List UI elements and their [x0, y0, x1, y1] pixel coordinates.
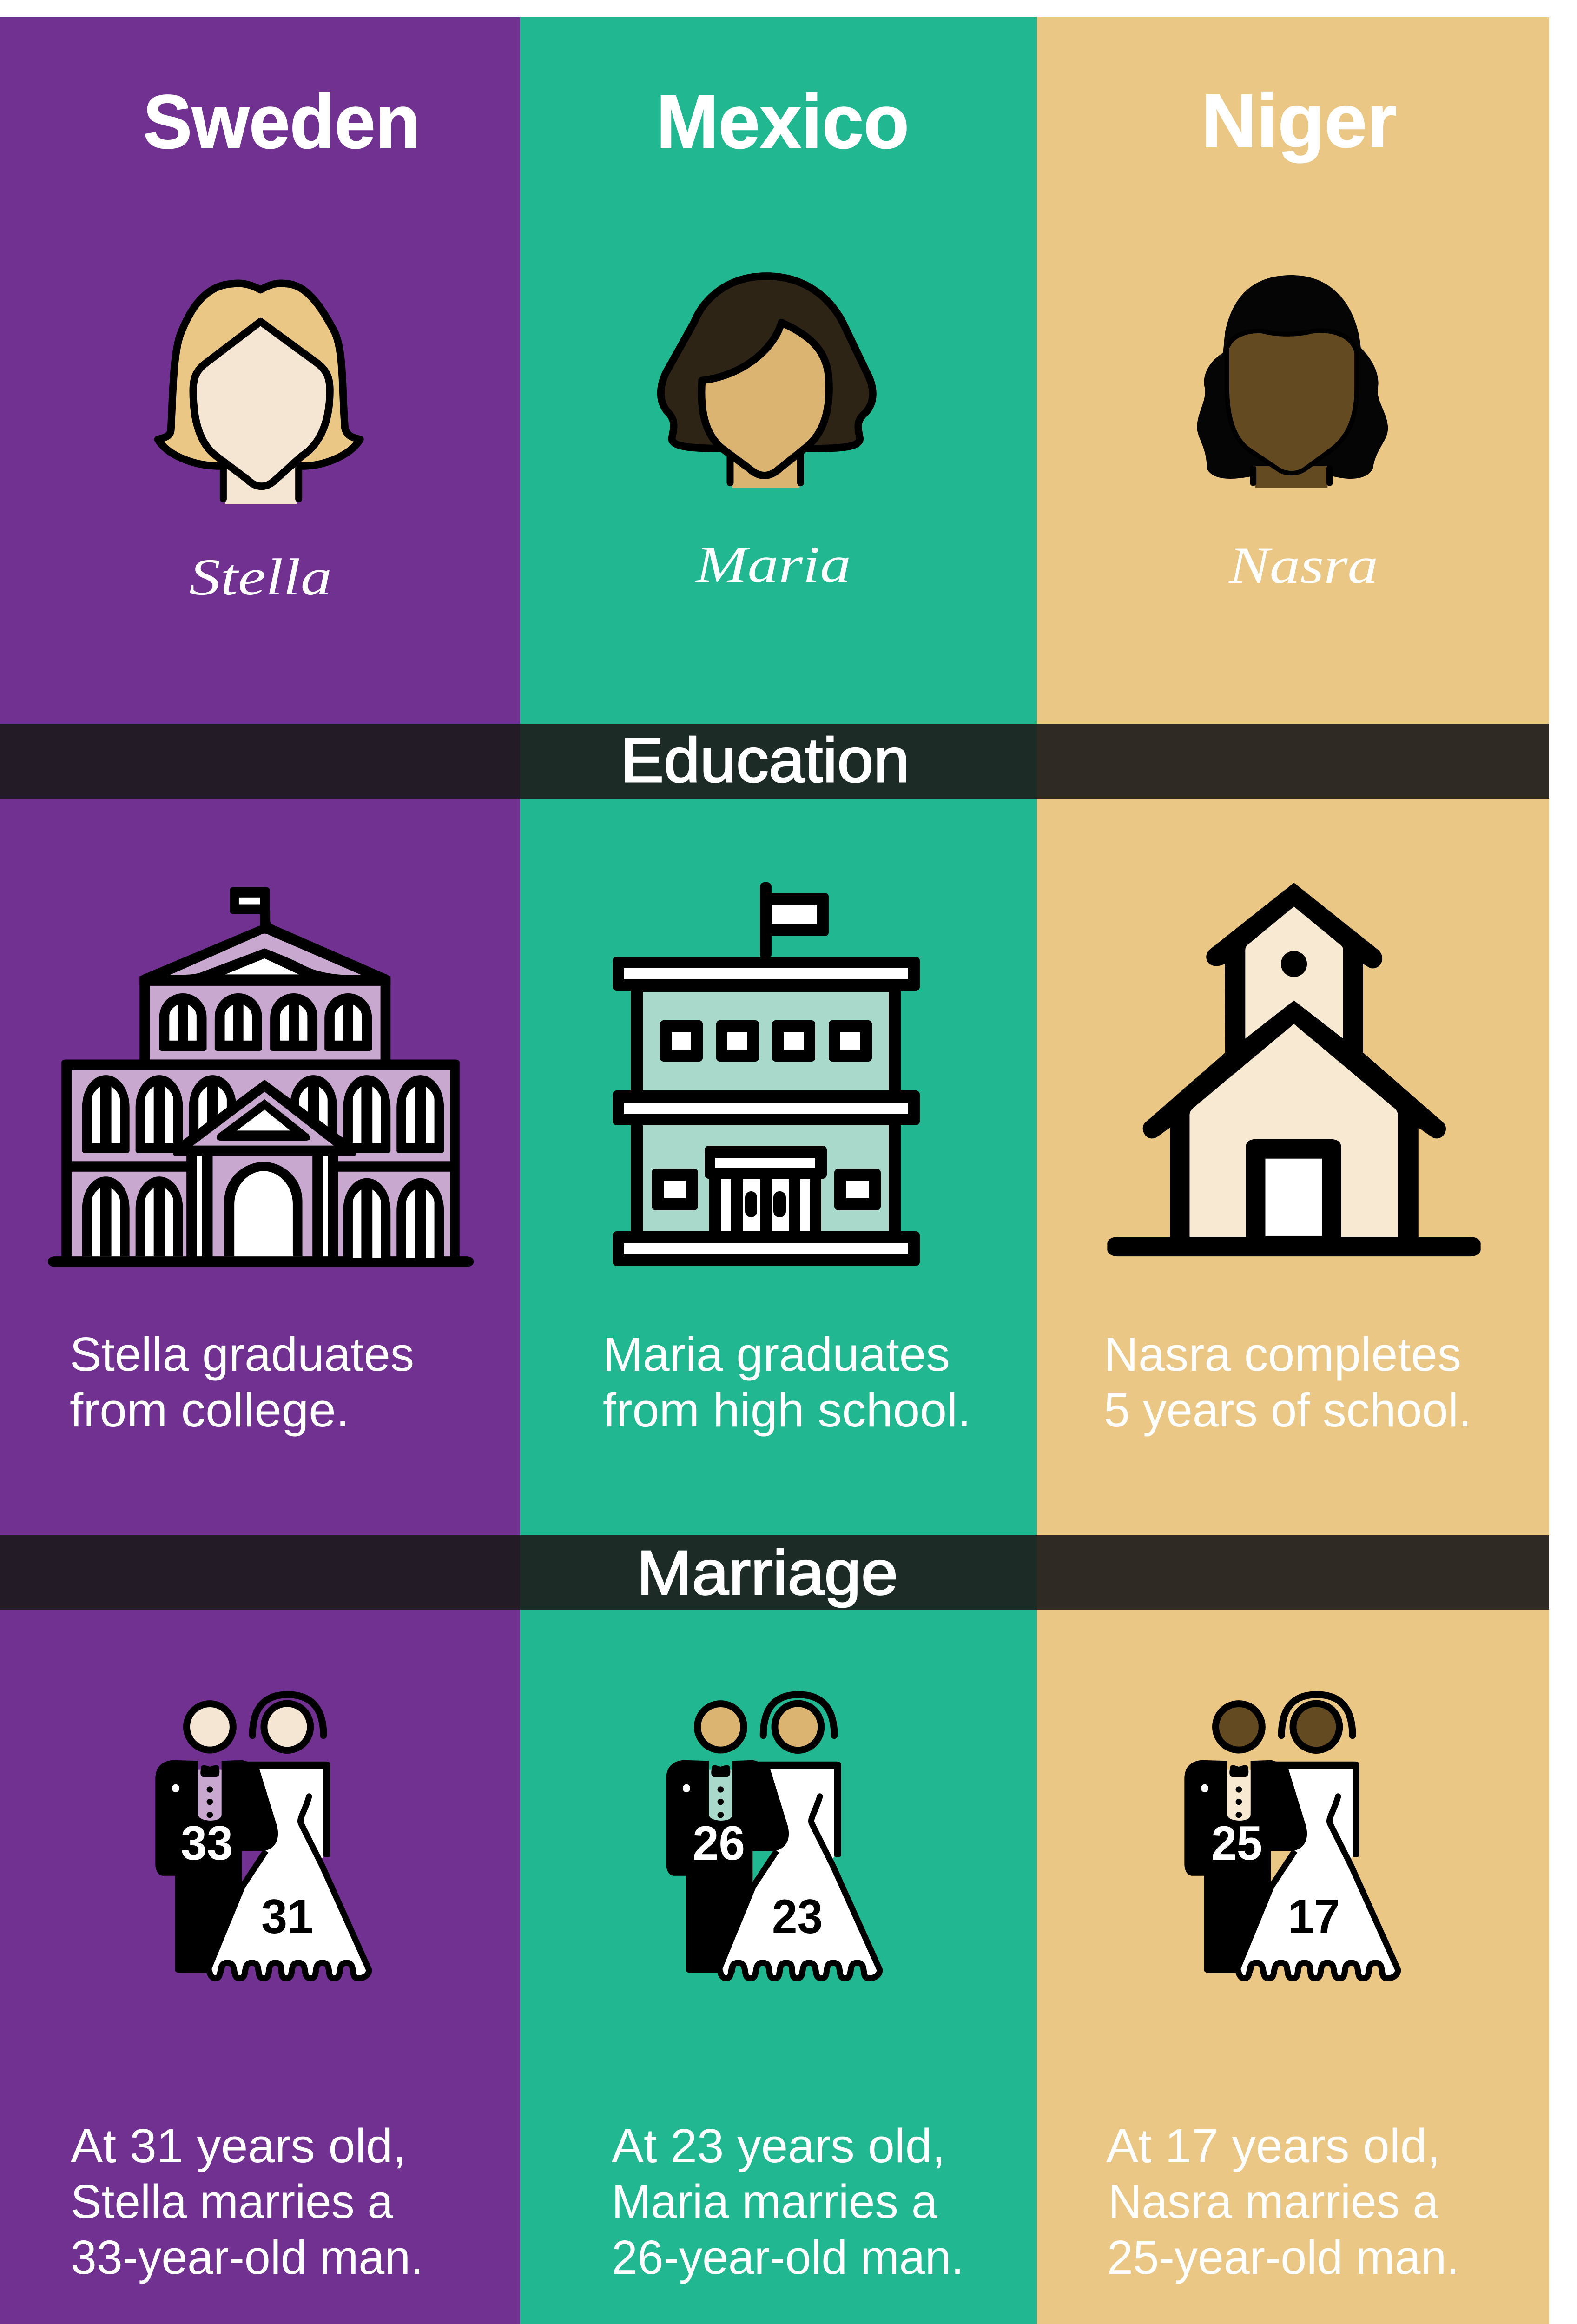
heading: Sweden: Sweden	[143, 79, 420, 164]
icon: Sweden college building	[48, 887, 474, 1267]
text: Stella marriage: At 31 years old,	[71, 2119, 406, 2172]
text: Maria education: from high school.	[603, 1383, 971, 1437]
text: Nasra marriage: 25-year-old man.	[1107, 2231, 1459, 2284]
icon: Niger couple, groom 25 and bride 17: 17	[1288, 1890, 1340, 1944]
section band: Education	[0, 724, 1549, 799]
panel: Niger column	[1037, 17, 1549, 2324]
text: Nasra marriage: At 17 years old,	[1106, 2119, 1440, 2172]
icon: Niger couple, groom 25 and bride 17: 25	[1211, 1816, 1262, 1870]
portrait: Nasra	[1197, 275, 1388, 488]
text: Nasra marriage	[1106, 2119, 1459, 2284]
text: Stella education: Stella graduates	[70, 1327, 414, 1381]
text: Maria marriage: 26-year-old man.	[612, 2231, 964, 2284]
text: Stella marriage	[71, 2119, 423, 2284]
icon: Mexico couple, groom 26 and bride 23: 26	[693, 1816, 745, 1870]
heading: Mexico: Mexico	[656, 79, 909, 164]
icon: Sweden couple, groom 33 and bride 31: 31	[261, 1890, 313, 1944]
text: Maria marriage: Maria marries a	[612, 2175, 938, 2228]
portrait: Maria	[661, 276, 873, 488]
icon: Niger school house	[1107, 883, 1481, 1256]
text: Maria marriage	[612, 2119, 964, 2284]
text: Stella education: from college.	[70, 1383, 350, 1437]
text: Stella marriage: 33-year-old man.	[71, 2231, 423, 2284]
text: Maria education: Maria graduates	[603, 1327, 950, 1381]
section band: Marriage	[0, 1535, 1549, 1610]
text: Nasra education: Nasra completes	[1104, 1327, 1461, 1381]
icon: Sweden couple, groom 33 and bride 31: 33	[181, 1816, 233, 1870]
text: Stella marriage: Stella marries a	[71, 2175, 394, 2228]
text: Maria marriage: At 23 years old,	[612, 2119, 945, 2172]
portrait: Stella	[158, 283, 360, 504]
name: Stella: Stella	[189, 548, 332, 606]
icon: Mexico couple, groom 26 and bride 23: 23	[772, 1890, 823, 1944]
text: Nasra education	[1104, 1327, 1471, 1437]
text: Stella education	[70, 1327, 414, 1437]
panel: Mexico column	[520, 17, 1037, 2324]
icon: Sweden couple, groom 33 and bride 31	[155, 1695, 369, 1978]
icon: Mexico high school building	[613, 882, 920, 1266]
text: Nasra marriage: Nasra marries a	[1108, 2175, 1439, 2228]
text: Maria education	[603, 1327, 971, 1437]
section band: Marriage: Marriage	[637, 1538, 898, 1608]
section band: Education: Education	[620, 725, 910, 795]
icon: Niger couple, groom 25 and bride 17	[1184, 1695, 1398, 1978]
panel: Sweden column	[0, 17, 520, 2324]
icon: Mexico couple, groom 26 and bride 23	[666, 1695, 880, 1978]
name: Nasra: Nasra	[1228, 537, 1378, 594]
heading: Niger: Niger	[1201, 78, 1397, 163]
name: Maria: Maria	[695, 536, 851, 594]
text: Nasra education: 5 years of school.	[1104, 1383, 1471, 1437]
